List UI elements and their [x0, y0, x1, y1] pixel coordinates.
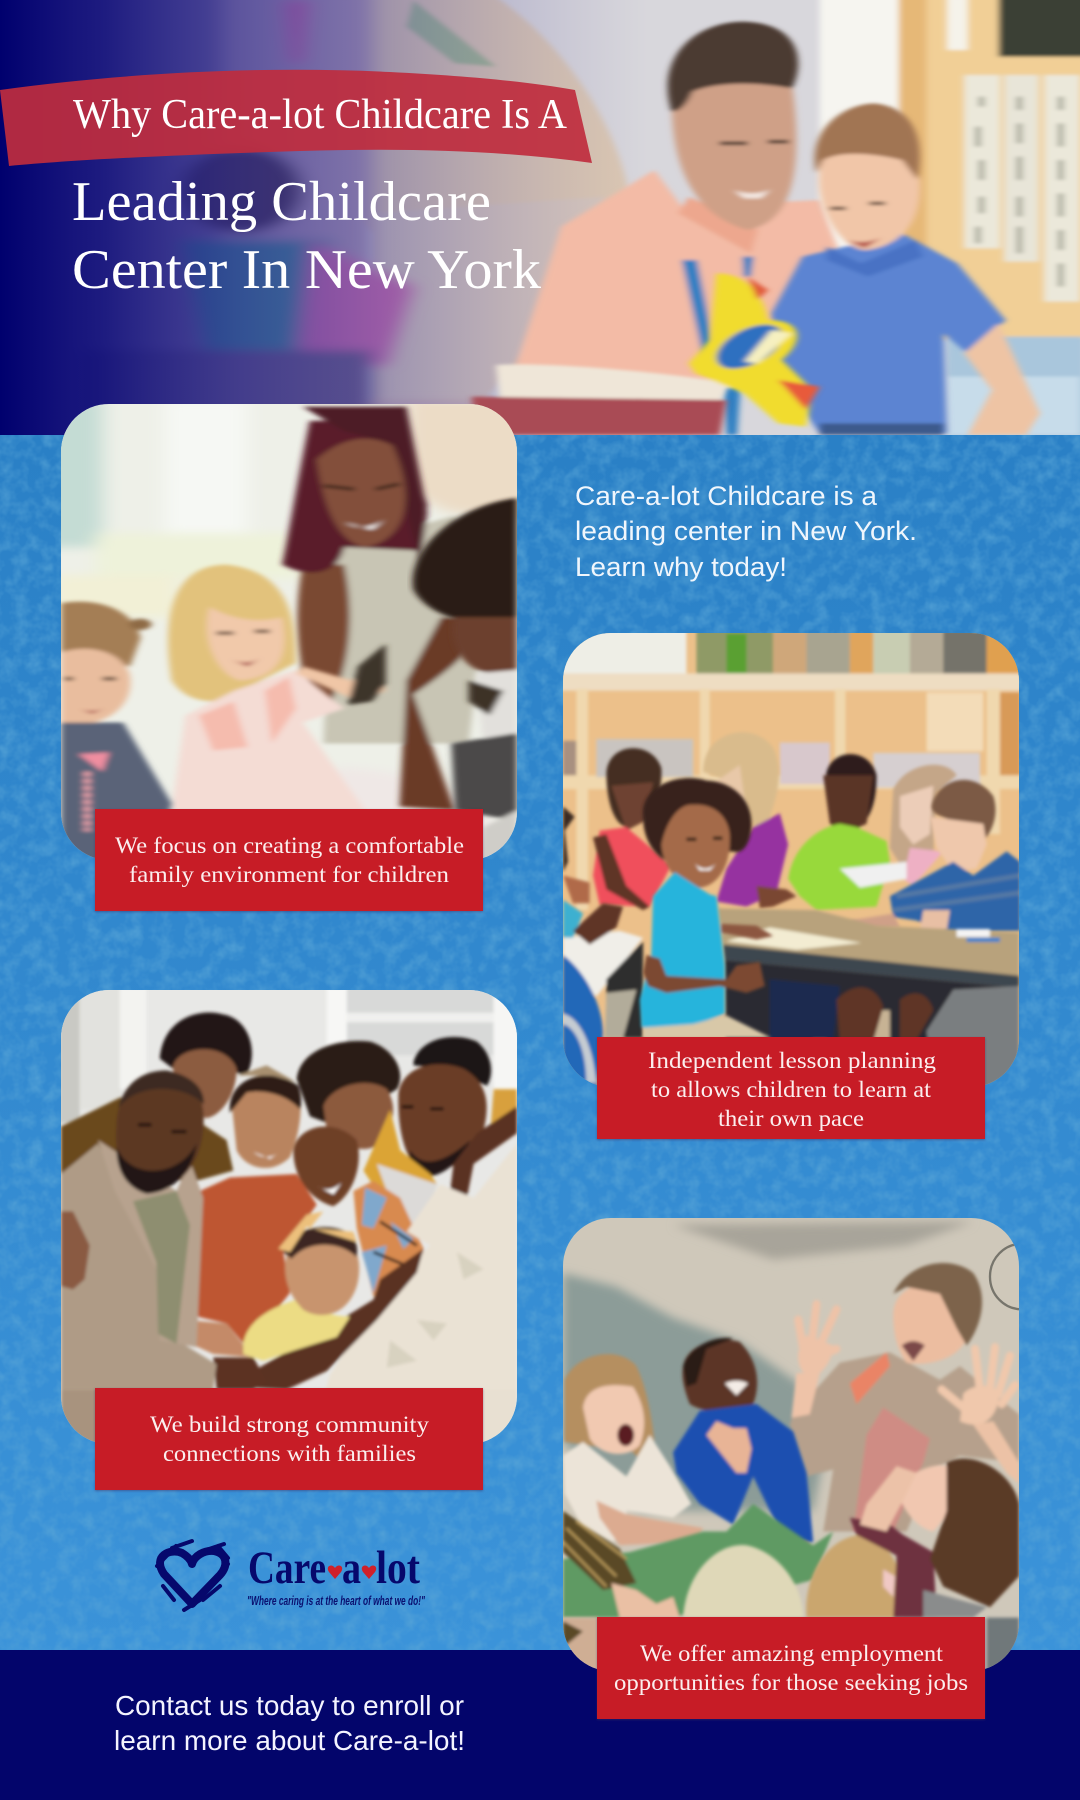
icon: red hearts	[328, 1565, 376, 1579]
figure: green table	[563, 1504, 833, 1618]
intro text	[575, 481, 917, 582]
caption box	[95, 1388, 483, 1490]
caption box: opportunities for those seeking jobs	[614, 1670, 968, 1696]
figure: lower edge	[563, 1618, 598, 1671]
figure: girl with open mouth	[563, 1354, 703, 1545]
panel: comfortable family environment	[40, 400, 531, 911]
logo tagline: "Where caring is at the heart of what we do!"	[247, 1593, 426, 1608]
photo: teacher with toddlers	[40, 400, 531, 863]
figure: background children and teacher	[593, 732, 957, 910]
logo: Care-a-lot	[157, 1541, 426, 1610]
figure: curly haired child	[413, 498, 517, 863]
caption box	[95, 809, 483, 911]
header photo: teacher and boy with toy plane	[0, 0, 1080, 435]
panel: community connections	[60, 987, 520, 1490]
figure: teacher	[513, 22, 847, 435]
caption box	[597, 1617, 985, 1719]
intro text: Learn why today!	[575, 552, 787, 582]
title: leading childcare center in new york	[72, 171, 541, 301]
intro text: leading center in New York.	[575, 516, 917, 546]
logo wordmark: a	[342, 1542, 361, 1594]
figure: boy in blue sweater	[671, 1335, 816, 1544]
footer band	[0, 1650, 1080, 1800]
footer call to action	[114, 1690, 465, 1756]
photo: teacher and children looking up	[563, 1218, 1053, 1671]
figure: teacher with raised hands	[790, 1263, 1019, 1531]
figure: family members	[61, 1013, 517, 1444]
logo wordmark	[248, 1542, 420, 1594]
title line: why care-a-lot: Why Care-a-lot Childcare Is A	[73, 92, 568, 138]
footer call to action: learn more about Care-a-lot!	[114, 1725, 465, 1756]
figure: girl with hair bun	[61, 602, 172, 863]
caption box: We focus on creating a comfortable	[115, 833, 464, 859]
caption box	[597, 1037, 985, 1139]
photo: children at classroom table	[560, 627, 1023, 1087]
title: leading childcare center in new york: Leading Childcare	[72, 171, 491, 233]
figure: boy in striped sweater	[854, 778, 1019, 933]
caption box: We offer amazing employment	[640, 1641, 943, 1667]
figure: boy in blue polo	[771, 103, 1040, 435]
title ribbon	[0, 70, 592, 166]
caption box: to allows children to learn at	[651, 1077, 931, 1103]
footer call to action: Contact us today to enroll or	[115, 1690, 464, 1721]
photo: hugging family	[60, 987, 520, 1444]
textured blue background	[0, 435, 1080, 1650]
figure: children in foreground	[683, 1459, 1019, 1671]
panel: independent lesson planning	[560, 627, 1023, 1139]
icon: scribbled heart	[157, 1541, 228, 1610]
logo wordmark: lot	[376, 1542, 420, 1594]
intro text: Care-a-lot Childcare is a	[575, 481, 878, 511]
caption box: We build strong community	[150, 1412, 429, 1438]
figure: wheel	[988, 1244, 1019, 1310]
figure: teacher	[282, 407, 489, 810]
caption box: Independent lesson planning	[648, 1048, 936, 1074]
panel: employment opportunities	[563, 1218, 1053, 1719]
logo wordmark: Care	[248, 1542, 326, 1594]
figure: smiling curly haired toddler	[640, 778, 773, 1038]
figure: table	[563, 806, 1019, 1087]
caption box: their own pace	[718, 1106, 864, 1132]
figure: blonde girl	[168, 565, 386, 810]
title: leading childcare center in new york: Center In New York	[72, 239, 541, 301]
caption box: connections with families	[163, 1441, 416, 1467]
caption box: family environment for children	[129, 862, 449, 888]
figure: book and toy plane	[472, 273, 820, 435]
